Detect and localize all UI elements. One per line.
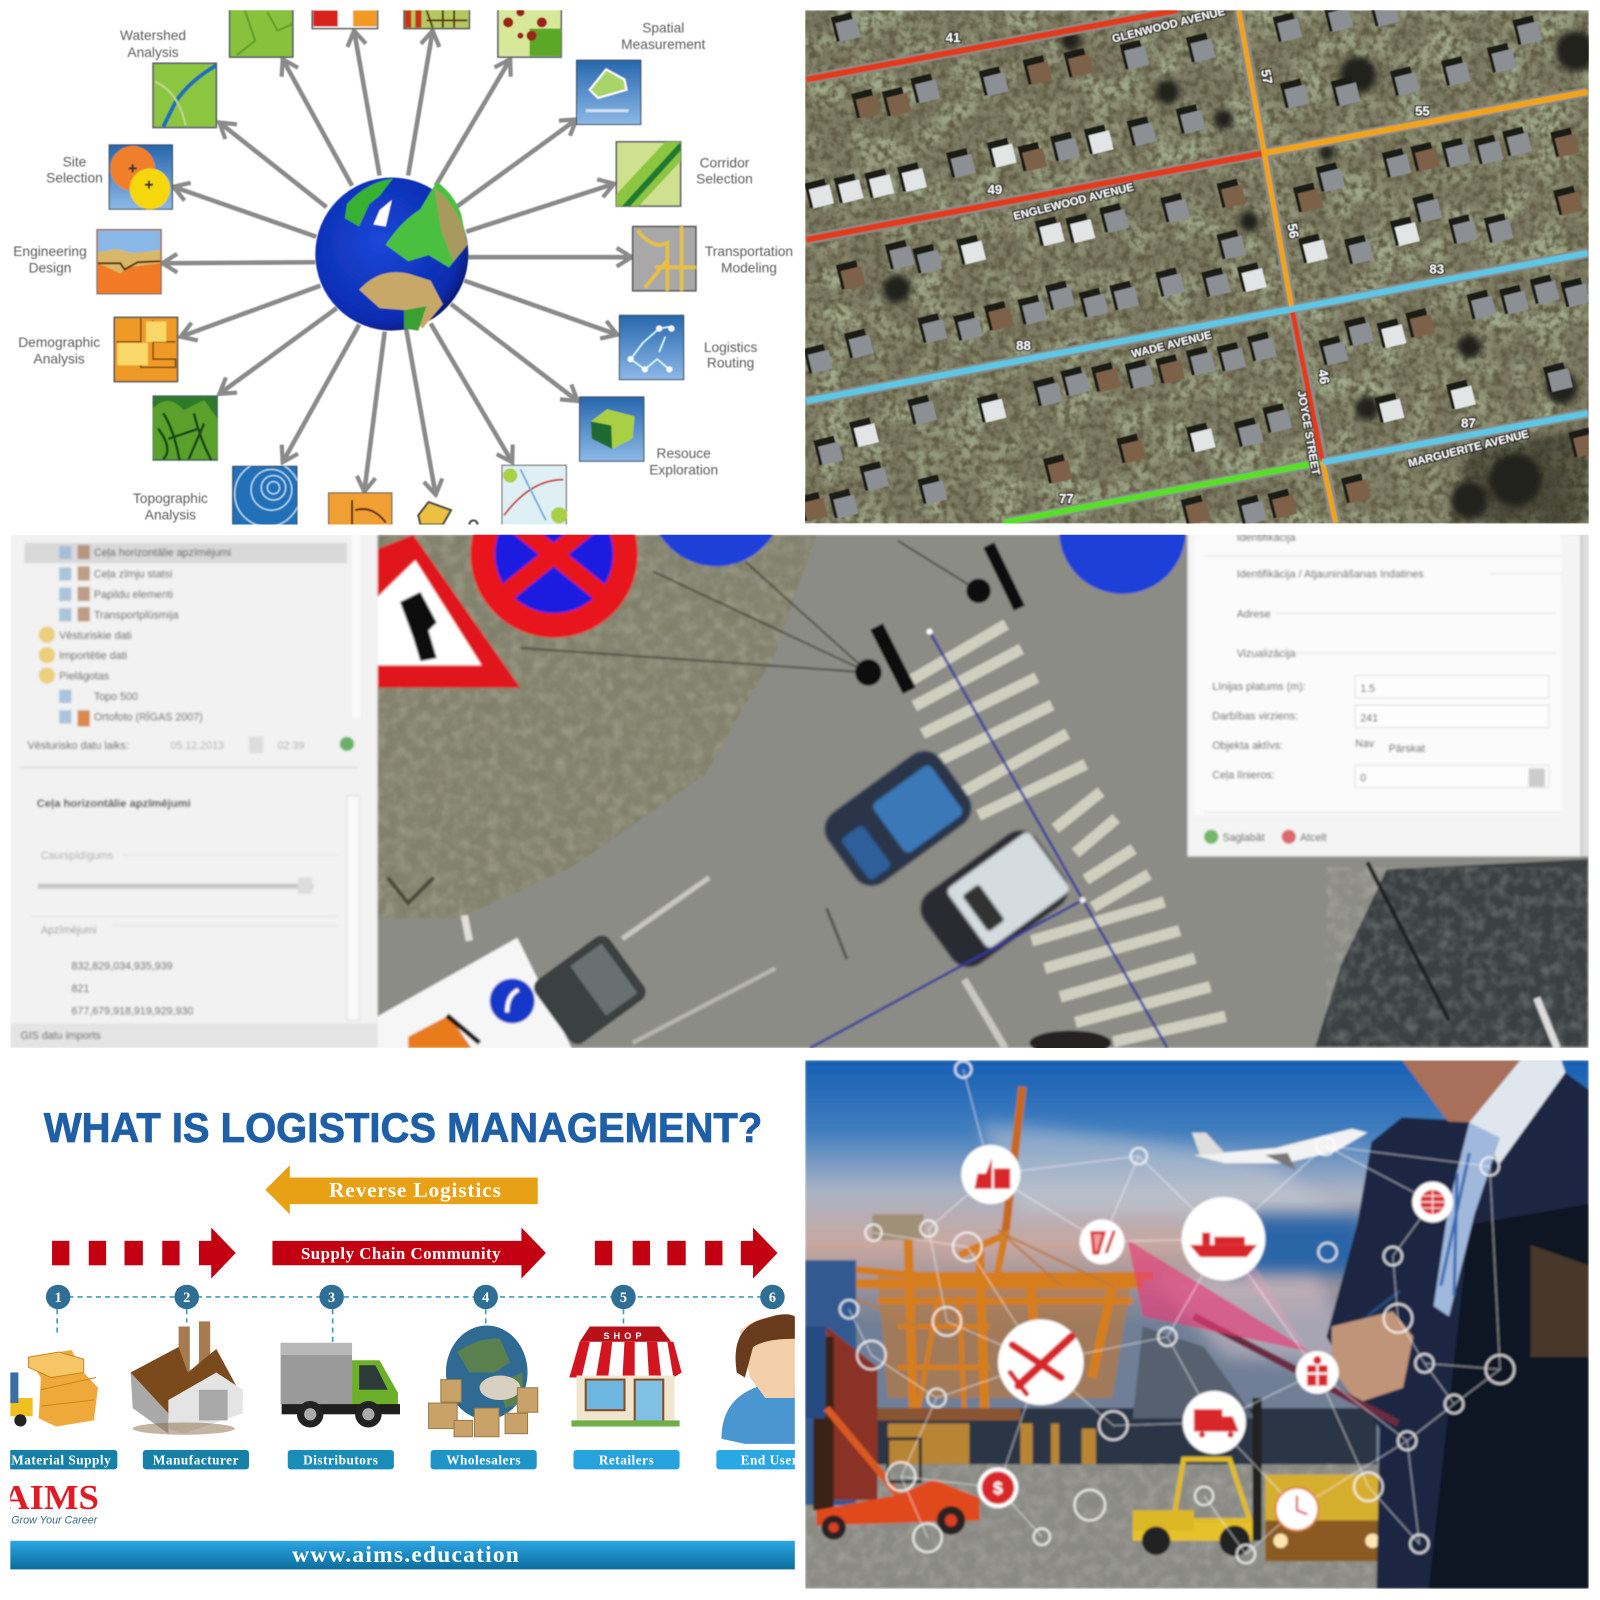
labels: analysis types: Measurement: [621, 37, 706, 52]
icon: retailers shop: SHOP: [603, 1331, 646, 1341]
street labels and segment numbers: 77: [1059, 491, 1074, 506]
dialog: object attributes: Objekta aktīvs:: [1212, 740, 1283, 752]
logo: AIMS: AIMS: [3, 1478, 99, 1517]
arrow: dashed red left: [52, 1228, 236, 1279]
icon: forklift circle: [961, 1145, 1020, 1204]
icon: resource exploration: [580, 397, 644, 461]
labels: analysis types: Analysis: [127, 45, 179, 60]
tablet projection: [1128, 1240, 1311, 1357]
markers: black symbols: [855, 545, 1019, 691]
transparency section: Apzīmējumi: [41, 925, 97, 937]
network connecting lines: [849, 1069, 1500, 1554]
icon: retailers shop: [569, 1327, 682, 1427]
icon: clock circle: [1276, 1488, 1318, 1531]
icon: document circle: [1080, 1219, 1124, 1264]
yellow forklift: [1133, 1398, 1257, 1556]
icon: ship circle: [1182, 1197, 1265, 1281]
icon: globe circle: [1412, 1182, 1453, 1222]
footer bar: GIS datu imports: [20, 1030, 101, 1042]
transparency section: 677,679,918,919,929,930: [71, 1005, 193, 1017]
icon: globe: [315, 178, 468, 331]
street labels and segment numbers: JOYCE STREET: [1295, 390, 1321, 476]
street labels and segment numbers: 55: [1415, 103, 1430, 118]
dialog: object attributes: Identifikācija: [1237, 532, 1296, 544]
icon: site selection: [109, 145, 172, 209]
layer list text: Topo 500: [94, 691, 138, 703]
aerial road photo: [378, 535, 1589, 1055]
aerial ground: [805, 10, 1596, 523]
street labels and segment numbers: 49: [988, 182, 1002, 197]
labels: supply chain stages: Material Supply: [11, 1452, 111, 1467]
labels: supply chain stages: Distributors: [303, 1452, 378, 1467]
arrows radiating from globe: [162, 31, 632, 495]
street labels and segment numbers: 46: [1315, 368, 1332, 385]
signs: no parking: [470, 470, 638, 638]
street labels and segment numbers: 41: [946, 30, 960, 45]
timeline dashed connectors: [57, 1297, 772, 1343]
icon: wholesalers globe and parcels: [429, 1326, 538, 1437]
shipping containers: [805, 1260, 878, 1510]
labels: analysis types: Selection: [696, 172, 753, 187]
dialog: object attributes: Pārskat: [1389, 743, 1425, 755]
icon: distributors truck: [281, 1343, 400, 1428]
icon: bottom survey marker: [418, 502, 478, 529]
crosswalk stripes: [912, 624, 1226, 1042]
layer list text: Ceļa zīmju statsi: [94, 569, 172, 581]
labels: supply chain stages: Wholesalers: [446, 1452, 521, 1467]
labels: supply chain stages: End User: [741, 1452, 798, 1467]
timeline numbers: 6: [769, 1290, 776, 1306]
street labels and segment numbers: GLENWOOD AVENUE: [1111, 6, 1227, 46]
labels: analysis types: Engineering: [13, 244, 87, 259]
street labels and segment numbers: WADE AVENUE: [1130, 329, 1214, 361]
car: blue: [823, 749, 973, 888]
icon: logistics routing: [619, 315, 684, 380]
layer list text: Importētie dati: [59, 650, 127, 662]
date controls: Vēsturisko datu laiks:: [28, 740, 129, 752]
arrow: reverse logistics: Reverse Logistics: [329, 1178, 502, 1202]
footer bar: [10, 1023, 378, 1048]
icon: engineering design: [97, 230, 161, 294]
labels: analysis types: Topographic: [133, 491, 208, 506]
street labels and segment numbers: 56: [1285, 222, 1302, 239]
icon: watershed: [153, 63, 216, 128]
houses: [801, 9, 1596, 515]
dialog: object attributes: Līnijas platums (m):: [1212, 681, 1306, 693]
rings: network nodes: [840, 1061, 1514, 1563]
icon: bottom river map: [502, 465, 567, 530]
icon: top red and orange: [310, 10, 380, 30]
icon: plane circle: [998, 1319, 1084, 1405]
transparency section: Ceļa horizontālie apzīmējumi: [37, 798, 191, 810]
layer list text: Vēsturiskie dati: [59, 630, 132, 642]
icon: transportation modeling: [633, 227, 696, 291]
signs: blue circles: [658, 534, 1187, 596]
dialog: object attributes: Atcelt: [1300, 832, 1327, 844]
street labels and segment numbers: 87: [1461, 416, 1476, 431]
businessman: [1194, 1060, 1589, 1589]
dialog: object attributes: Ceļa līnieros:: [1212, 770, 1275, 782]
port cranes: [805, 1087, 1153, 1420]
arrow: supply chain community: Supply Chain Community: [301, 1244, 501, 1263]
icon: spatial measurement: [577, 60, 641, 124]
labels: analysis types: Demographic: [18, 335, 100, 350]
panel: aerial street map: [801, 6, 1596, 523]
street labels and segment numbers: MARGUERITE AVENUE: [1407, 428, 1531, 470]
labels: analysis types: [13, 21, 793, 522]
timeline numbers: 5: [620, 1290, 627, 1306]
dialog: object attributes: [1188, 532, 1589, 856]
layer list icons: [39, 545, 90, 727]
transparency section: [31, 798, 337, 1017]
side panel: layers: [10, 535, 378, 1048]
street labels and segment numbers: 88: [1016, 338, 1031, 353]
sky and port scene: [805, 1060, 1589, 1589]
labels: analysis types: Logistics: [704, 340, 758, 355]
panel: logistics network photo: [805, 1060, 1589, 1589]
layer list text: Papildu elementi: [94, 589, 173, 601]
dialog: object attributes: Identifikācija / Atjaunināšanas Indatines: [1237, 569, 1424, 581]
date controls: [20, 737, 357, 767]
layer list text: Ceļa horizontālie apzīmējumi: [94, 547, 231, 559]
street labels and segment numbers: 83: [1429, 261, 1444, 276]
title: WHAT IS LOGISTICS MANAGEMENT?: [44, 1104, 762, 1151]
labels: analysis types: Watershed: [120, 28, 186, 43]
labels: analysis types: Exploration: [649, 462, 718, 477]
icon: corridor selection: [614, 140, 682, 208]
labels: supply chain stages: Retailers: [599, 1452, 654, 1467]
icon: demographic analysis: [114, 317, 178, 382]
labels: analysis types: Selection: [46, 171, 103, 186]
red forklift: [816, 1408, 980, 1540]
dialog: object attributes: Nav: [1355, 738, 1375, 750]
labels: analysis types: Design: [29, 260, 71, 275]
footer bar: website: [10, 1541, 795, 1569]
signs: warning triangle: [372, 535, 520, 688]
icon: top striped: [402, 10, 471, 30]
dialog: object attributes: Adrese: [1237, 608, 1271, 620]
dialog: object attributes: 1.5: [1360, 683, 1375, 695]
date controls: 05.12.2013: [170, 740, 224, 752]
labels: analysis types: Analysis: [34, 351, 85, 366]
timeline numbers: 4: [482, 1290, 489, 1306]
icon: dollar circle: $: [993, 1478, 1003, 1498]
timeline numbers: 2: [183, 1290, 190, 1306]
icon: top green map: [230, 0, 293, 57]
panel: GIS applications wheel: [13, 0, 793, 534]
icon: truck circle: [1183, 1391, 1246, 1454]
date controls: 02:39: [278, 740, 304, 752]
layer list text: Pielāgotas: [59, 671, 109, 683]
logo: AIMS: Grow Your Career: [11, 1514, 98, 1526]
layer list text: Ortofoto (RĪGAS 2007): [94, 711, 203, 723]
timeline numbers: 1: [55, 1290, 62, 1306]
layer list text: Transportplūsmija: [94, 609, 179, 621]
icon: gift circle: [1296, 1351, 1339, 1394]
car: white: [919, 828, 1070, 969]
truck: [378, 931, 650, 1048]
drawn blue lines: [810, 629, 1167, 1048]
dialog: object attributes: Vizualizācija: [1237, 648, 1295, 660]
transparency section: 821: [71, 983, 89, 995]
dialog: object attributes: Darbības virziens:: [1212, 710, 1298, 722]
transparency section: 832,829,034,935,939: [71, 960, 173, 972]
footer bar: website: www.aims.education: [292, 1542, 520, 1568]
labels: analysis types: Modeling: [721, 260, 777, 275]
labels: analysis types: Routing: [707, 355, 754, 370]
sign posts: [520, 541, 979, 672]
icon: material supply boxes: [10, 1350, 98, 1427]
icon: topographic analysis: [231, 465, 298, 524]
dialog: object attributes: 0: [1360, 773, 1366, 785]
icon: bottom orange network: [327, 492, 394, 524]
airplane: [1192, 1129, 1367, 1170]
timeline numbers: 3: [328, 1290, 335, 1306]
dialog: object attributes: Saglabāt: [1222, 832, 1265, 844]
labels: analysis types: Site: [63, 154, 87, 169]
arrow: dashed red right: [595, 1228, 778, 1279]
labels: analysis types: Analysis: [145, 507, 196, 522]
labels: supply chain stages: [2, 1450, 822, 1469]
arrow: reverse logistics: [265, 1165, 538, 1214]
street labels and segment numbers: 57: [1258, 68, 1275, 85]
panel: what is logistics management: [2, 1104, 822, 1569]
street labels and segment numbers: [946, 6, 1531, 506]
transparency section: Caurspīdīgums: [41, 850, 113, 862]
labels: analysis types: Resouce: [657, 446, 711, 461]
yellow truck: [1265, 1474, 1380, 1561]
labels: analysis types: Corridor: [700, 155, 750, 170]
street labels and segment numbers: ENGLEWOOD AVENUE: [1012, 181, 1136, 223]
timeline numbers: [46, 1285, 785, 1309]
panel: road inventory GIS screenshot: [10, 534, 1589, 1048]
labels: analysis types: Transportation: [705, 244, 793, 259]
layer list text: [59, 547, 231, 723]
icon: 3D terrain: [153, 396, 217, 460]
icon: top dots: [498, 0, 561, 57]
icon: end user person: [721, 1314, 795, 1444]
arrow: supply chain community: [272, 1228, 546, 1279]
roads with coloured condition lines: [806, 10, 1588, 522]
icon: dollar circle: [978, 1467, 1018, 1508]
labels: supply chain stages: Manufacturer: [153, 1452, 239, 1467]
labels: analysis types: Spatial: [642, 21, 684, 36]
dialog: object attributes: 241: [1360, 712, 1378, 724]
icon: manufacturer factory: [131, 1321, 243, 1435]
